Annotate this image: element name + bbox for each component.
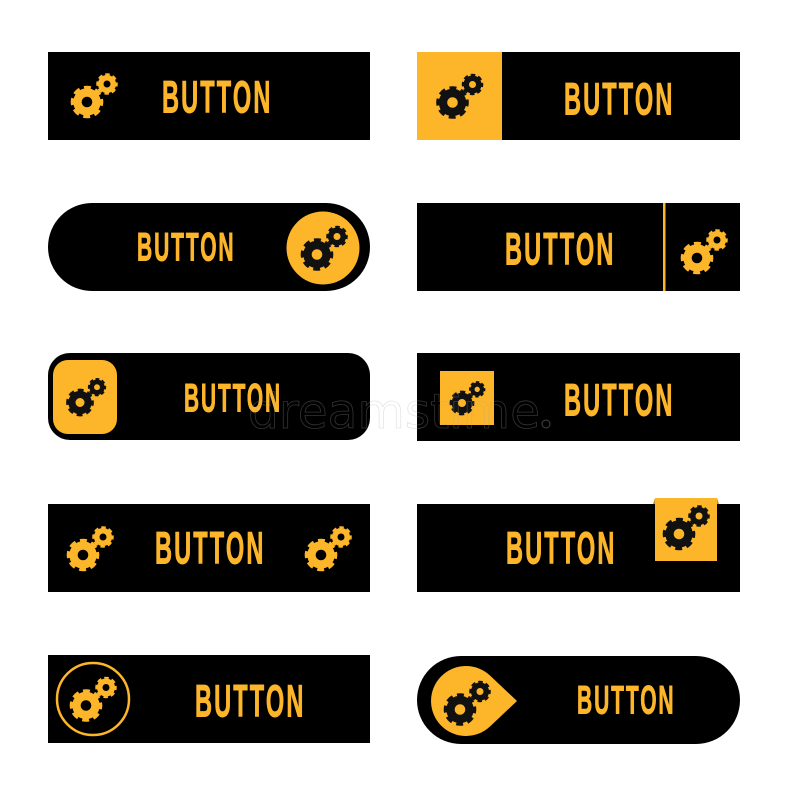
button 2: rectangle with yellow left block (417, 52, 740, 140)
button 1: plain rectangle with gears on the left (48, 52, 370, 140)
button 6: rectangle with small yellow square (417, 353, 740, 441)
button 9: rectangle with outlined circle (48, 655, 370, 743)
button 8: rectangle with overlapping yellow tab (417, 498, 740, 592)
button 5: rounded button with yellow rounded square: BUTTON (184, 376, 282, 420)
button 10: pill with yellow teardrop: BUTTON (577, 678, 676, 722)
button 2: rectangle with yellow left block: BUTTON (564, 74, 674, 124)
button 5: rounded button with yellow rounded square (48, 353, 370, 440)
button 4: rectangle with divider and gears on the right (417, 203, 740, 291)
button 9: rectangle with outlined circle: BUTTON (195, 676, 306, 726)
button 7: rectangle with gears on both sides: BUTTON (155, 522, 266, 574)
button 3: pill with yellow circle on the right (48, 203, 370, 291)
button 6: rectangle with small yellow square: BUTTON (564, 374, 674, 426)
button 8: rectangle with overlapping yellow tab: BUTTON (506, 522, 616, 574)
watermark: dreamstime (248, 384, 540, 440)
button 3: pill with yellow circle on the right: BUTTON (137, 226, 236, 270)
button 1: plain rectangle with gears on the left: BUTTON (162, 72, 272, 122)
button 7: rectangle with gears on both sides (48, 504, 370, 592)
button 4: rectangle with divider and gears on the right: BUTTON (505, 224, 616, 274)
button 10: pill with yellow teardrop (417, 656, 740, 744)
